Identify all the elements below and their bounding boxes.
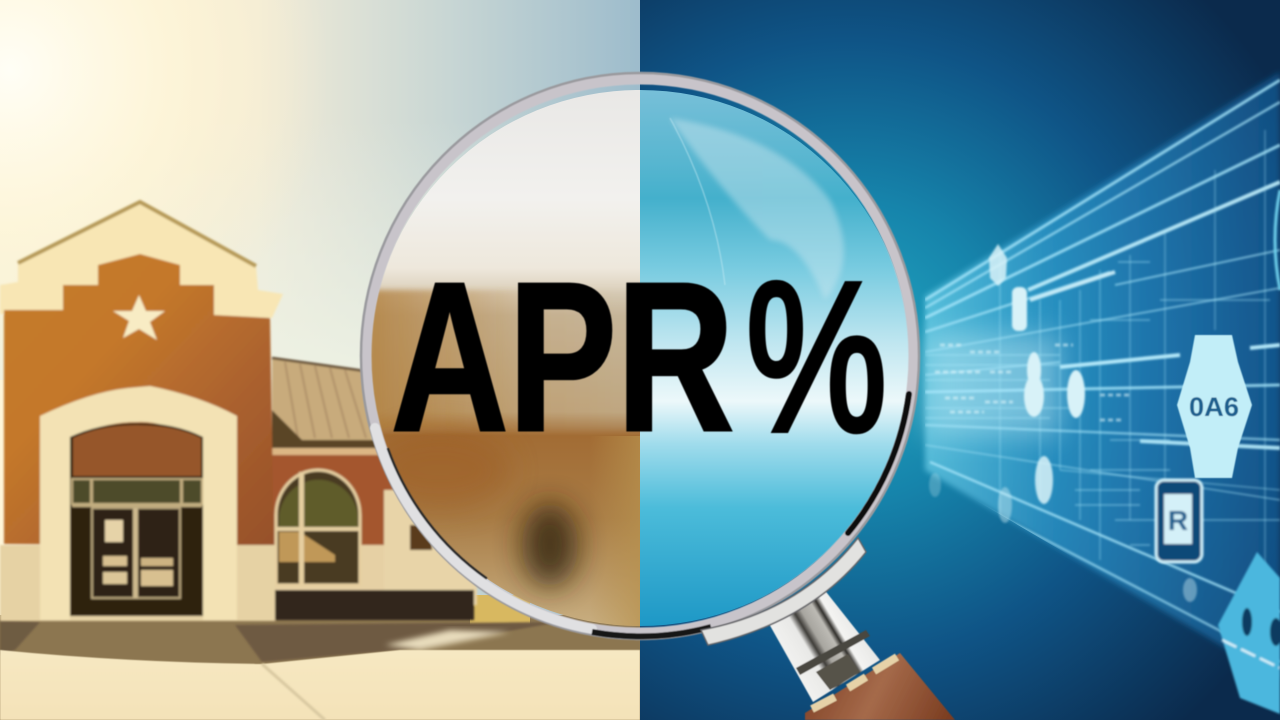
data panel glow (925, 72, 1280, 680)
square data icon (1156, 480, 1202, 562)
side wing wall (272, 440, 477, 620)
magnifying glass (361, 73, 955, 720)
lens glass left half (368, 88, 912, 628)
data streams (925, 80, 1280, 662)
data node icons (929, 190, 1280, 602)
double doors (92, 508, 180, 598)
transom and frame (72, 479, 202, 507)
lens glass right half (640, 88, 912, 628)
hexagon badge with code: 0A6 (1189, 392, 1239, 422)
brick facade (4, 254, 274, 546)
bottom right hexagon icon (1218, 552, 1280, 714)
title: APR%: % (746, 238, 887, 475)
cream base (0, 545, 275, 621)
icon: star (113, 295, 165, 340)
wooden handle (805, 653, 955, 720)
square data icon: R (1168, 505, 1188, 536)
hexagon badge with code (1177, 335, 1252, 478)
bank building (0, 202, 477, 621)
entrance recess (70, 423, 203, 616)
arched entrance surround (40, 386, 237, 620)
gable (0, 202, 283, 318)
roof of side wing (272, 358, 372, 446)
handle collar (701, 538, 866, 645)
left panel: warm sky and ground (0, 0, 640, 720)
title: APR%: APR (391, 238, 734, 475)
right panel: blue digital background (640, 0, 1280, 720)
handle shaft (768, 588, 880, 702)
lens rim (361, 73, 919, 639)
arched window (276, 470, 360, 585)
